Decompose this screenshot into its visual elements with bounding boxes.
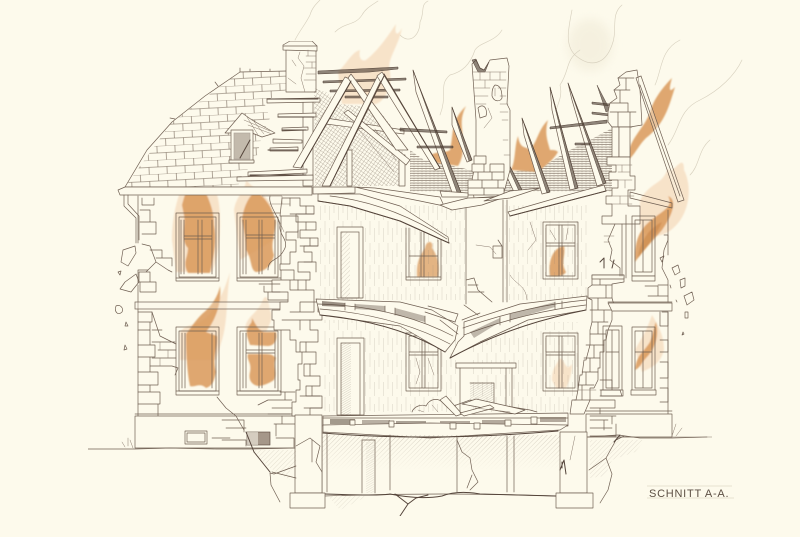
- broken roof laths: [237, 98, 320, 181]
- left roof: [125, 68, 300, 188]
- dormer: [225, 113, 275, 163]
- caption label: SCHNITT A-A: SCHNITT A-A.: [649, 488, 729, 500]
- flame: behind right rafters: [511, 120, 558, 172]
- window right lower: [631, 327, 656, 395]
- falling debris: [115, 246, 694, 350]
- A frame 1: [293, 77, 352, 168]
- purlins: [318, 67, 398, 74]
- upper broken wall: [608, 215, 626, 278]
- central chimney: [468, 58, 510, 198]
- right plinth: [586, 414, 672, 437]
- chimney base bricks: [468, 156, 504, 195]
- lower floor with beams: [323, 413, 568, 438]
- left chimney: [283, 41, 317, 92]
- left wall: [135, 196, 296, 448]
- window right upper: [632, 216, 655, 281]
- window lower 1: [176, 327, 219, 395]
- plinth: [135, 416, 296, 448]
- middle floor right arch: [450, 296, 587, 358]
- window lower 2: [237, 327, 281, 395]
- flames: [172, 24, 689, 388]
- right wall and windows: [578, 210, 672, 437]
- right gable wall: [602, 70, 684, 224]
- basement and foundations: [290, 415, 593, 516]
- middle floor left arch: [316, 299, 458, 352]
- inner lower window right: [543, 333, 578, 391]
- crack: left foundation: [246, 432, 270, 472]
- inner upper window: [406, 228, 441, 280]
- window right narrow: [601, 326, 623, 396]
- inner doors and windows: [337, 200, 578, 415]
- right pillar: [556, 432, 593, 508]
- basement door: [362, 440, 375, 493]
- back roof hatching, centre: [410, 128, 612, 192]
- band: [135, 302, 287, 309]
- broken rafters: [400, 70, 610, 195]
- line drawing of the house: [88, 41, 712, 516]
- wall hatching: [138, 205, 590, 446]
- rubble pile: [412, 396, 537, 416]
- collar beam: [326, 118, 404, 134]
- flame: right gable streak: [628, 78, 675, 160]
- flame: lower left window: [180, 272, 230, 360]
- upper floor wreckage: [318, 185, 606, 243]
- door lower: [337, 338, 364, 415]
- flame: behind central rafters: [428, 106, 466, 166]
- left gable interior crosshatch: [314, 88, 404, 186]
- flame: top left window: [172, 145, 220, 272]
- flame: inner upper window: [417, 242, 439, 277]
- door upper: [337, 227, 363, 298]
- left broken brick column: [259, 196, 322, 416]
- eaves and gutter: [118, 187, 672, 243]
- basement cracks: [457, 440, 478, 490]
- left pillar: [290, 415, 325, 508]
- window upper 1: [176, 213, 219, 281]
- flame: upper right window: [640, 163, 689, 236]
- flame: second left window: [234, 180, 274, 260]
- ground lines and cracks: [88, 397, 712, 510]
- lower left bricks: [138, 312, 160, 416]
- fireplace: [456, 363, 516, 415]
- flame: lower right window: [635, 315, 664, 372]
- central wall: [466, 200, 507, 304]
- vertical timbers: [303, 100, 313, 186]
- flame: second lower left window: [245, 297, 271, 332]
- timber frame: [237, 67, 440, 186]
- A frame 2: [322, 74, 384, 186]
- inner right window upper: [543, 222, 578, 279]
- left windows: [176, 213, 281, 395]
- smoke wisps: [295, 0, 742, 175]
- window upper 2: [237, 213, 281, 281]
- flame: top of roof: [338, 24, 402, 104]
- crack: right foundation: [589, 436, 624, 503]
- flame: inner right window: [550, 246, 566, 276]
- inner lower window left: [406, 333, 441, 391]
- right brick column: [570, 215, 626, 414]
- flame: lower inner right window: [552, 358, 572, 388]
